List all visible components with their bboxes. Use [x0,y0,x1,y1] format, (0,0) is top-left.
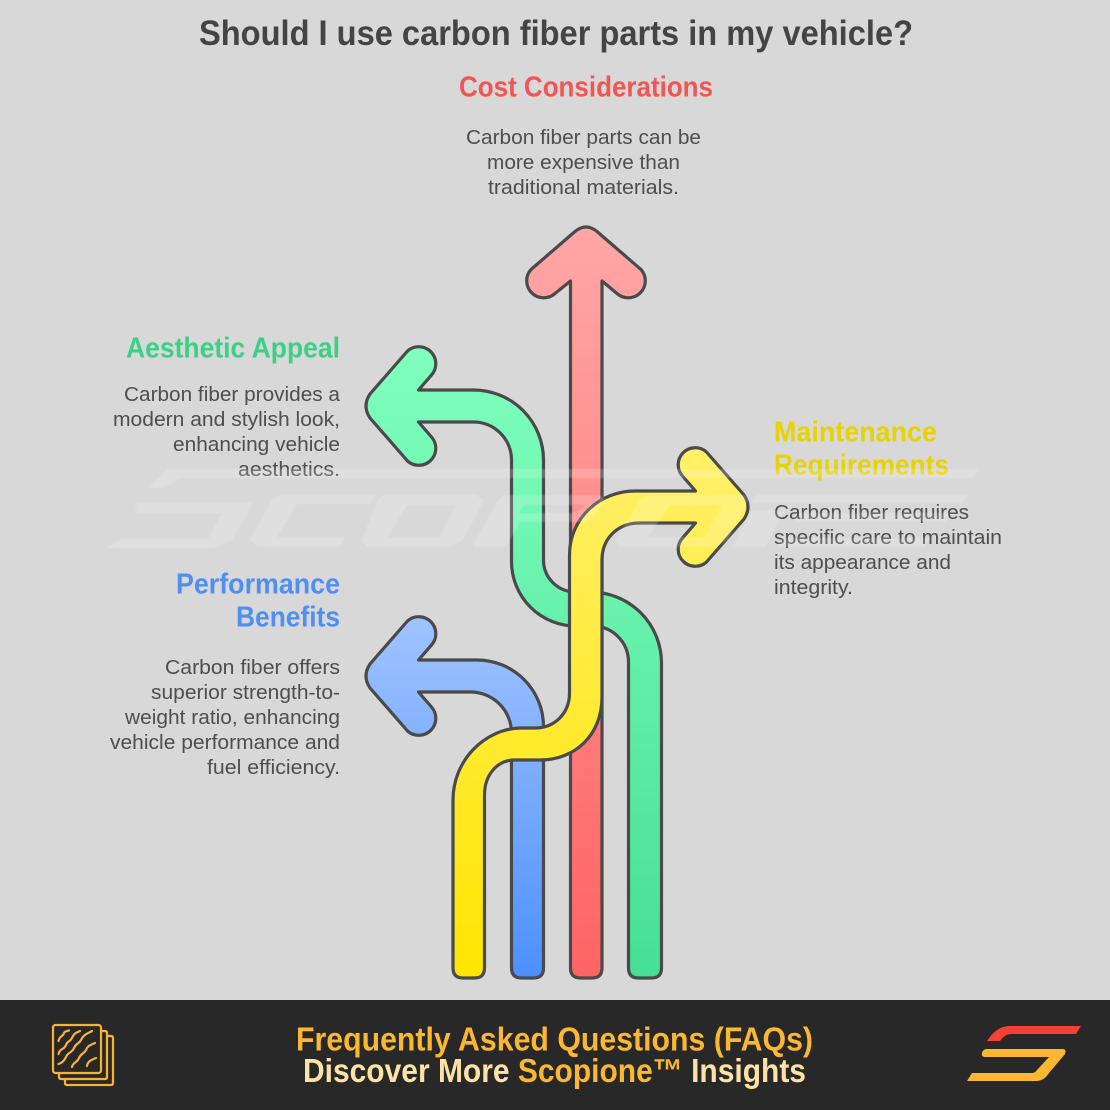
text block: aesthetic appeal [113,383,341,481]
arrow: red up [527,227,645,978]
panel: aesthetic appeal [113,332,341,481]
text block: maintenance requirements: integrity. [774,576,853,599]
text block: cost considerations: more expensive than [487,151,680,174]
text block: aesthetic appeal: enhancing vehicle [173,433,340,456]
arrow: green left [366,347,662,978]
text block: performance benefits [110,656,340,779]
text block: aesthetic appeal: Carbon fiber provides a [124,383,341,406]
heading: performance benefits: Benefits [236,602,340,634]
footer heading: Discover More Scopione™ Insights [303,1052,806,1089]
heading: cost considerations: Cost Considerations [459,72,713,104]
text block: aesthetic appeal: aesthetics. [238,458,340,481]
text block: performance benefits: superior strength-to- [151,681,340,704]
text block: maintenance requirements [774,501,1002,599]
text block: cost considerations: traditional materials. [488,176,679,199]
text block: performance benefits: vehicle performance and [110,731,340,754]
footer heading [296,1020,813,1089]
arrow: blue left [366,617,544,978]
icon: carbon fiber sheets [53,1025,113,1085]
watermark [107,469,980,548]
text block: maintenance requirements: Carbon fiber requires [774,501,969,524]
title: Should I use carbon fiber parts in my vehicle? [199,14,913,53]
text block: maintenance requirements: specific care to maintain [774,526,1002,549]
footer heading: Frequently Asked Questions (FAQs) [296,1020,813,1058]
heading: maintenance requirements: Requirements [774,450,949,482]
text block: cost considerations: Carbon fiber parts can be [466,126,701,149]
text block: cost considerations [466,126,701,199]
text block: aesthetic appeal: modern and stylish look, [113,408,340,431]
text block: maintenance requirements: its appearance and [774,551,951,574]
heading: maintenance requirements [774,416,949,482]
heading: performance benefits [176,568,340,634]
text block: performance benefits: weight ratio, enhancing [124,706,340,729]
footer band [0,1000,1110,1110]
heading: aesthetic appeal: Aesthetic Appeal [126,332,340,364]
text block: performance benefits: Carbon fiber offers [165,656,340,679]
panel: performance benefits [110,568,340,779]
panel: maintenance requirements [774,416,1002,599]
heading: maintenance requirements: Maintenance [774,416,937,448]
arrow: yellow right [453,448,748,978]
heading: performance benefits: Performance [176,568,340,600]
panel: cost considerations [459,72,713,199]
text block: performance benefits: fuel efficiency. [207,756,340,779]
icon: scopione logo [967,1026,1081,1081]
arrow diagram [366,227,748,978]
